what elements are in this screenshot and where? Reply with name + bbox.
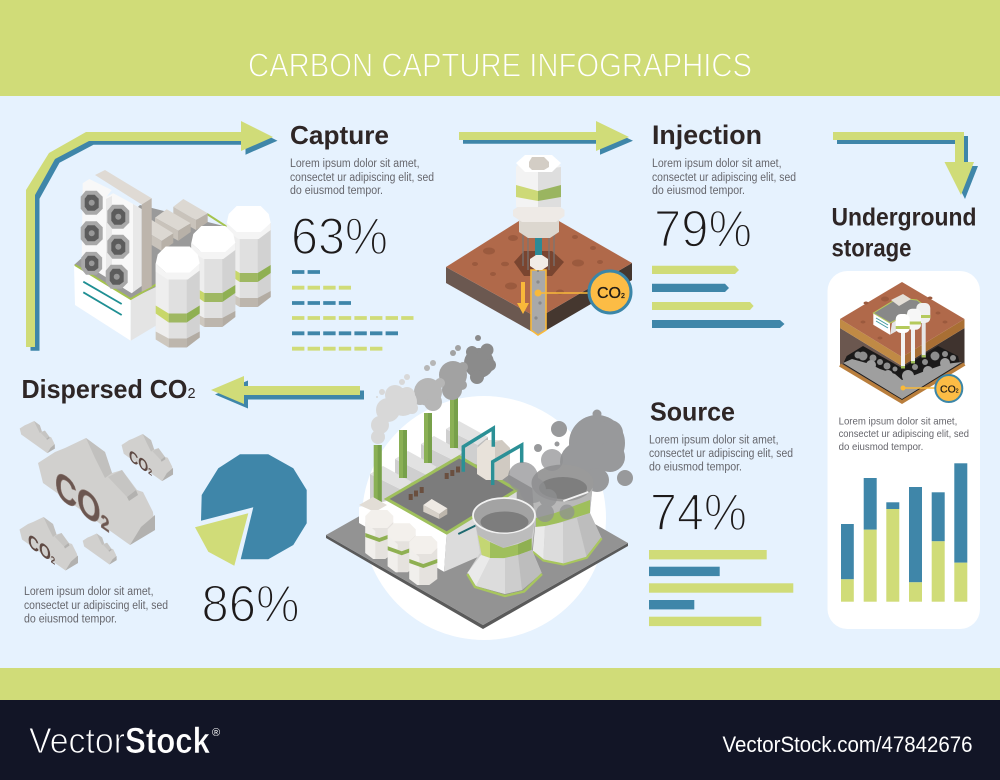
- arrow: to injection: [459, 121, 633, 155]
- leader line: [903, 387, 937, 389]
- upper body: [532, 482, 593, 527]
- footer bar: [0, 700, 1000, 780]
- section: dispersed CO2: [20, 374, 307, 634]
- yellow arrow: [517, 282, 529, 314]
- icon: injection well: [446, 155, 632, 335]
- rim: [473, 498, 535, 533]
- text: source description: [649, 434, 793, 474]
- stacked bar chart: [841, 463, 967, 602]
- band: [478, 535, 490, 558]
- icon: injection well: CO2: [597, 285, 625, 302]
- leader line: [538, 292, 590, 294]
- section: capture: [290, 120, 434, 349]
- rim: [532, 464, 594, 502]
- cloud bottom left: [20, 517, 78, 570]
- text: injection description: consectet ur adipiscing elit, sed: [652, 172, 796, 184]
- body: [467, 514, 542, 594]
- text: source description: do eiusmod tempor.: [649, 462, 742, 474]
- icon: CO2 clouds: CO2: [28, 529, 56, 569]
- text: capture description: consectet ur adipiscing elit, sed: [290, 172, 434, 184]
- upper body: [474, 514, 536, 548]
- heading: source: Source: [650, 396, 735, 426]
- text: source description: consectet ur adipiscing elit, sed: [649, 448, 793, 460]
- section: injection: [652, 120, 796, 328]
- text: dispersed description: consectet ur adipiscing elit, sed: [24, 600, 168, 612]
- chimney smoke: [371, 335, 496, 444]
- icon: CO2 clouds: [20, 421, 173, 570]
- stat: 79%: 79%: [654, 201, 752, 259]
- main cloud: [38, 438, 155, 545]
- arrow: to capture: [26, 121, 278, 351]
- chimneys: [374, 398, 458, 508]
- lower faces: [533, 526, 545, 560]
- teal pipes: [463, 428, 493, 472]
- text: injection description: [652, 158, 796, 197]
- front cooling tower: [467, 498, 542, 596]
- watermark logo: Vector: [29, 720, 125, 761]
- small cloud top left: [20, 421, 55, 453]
- text: dispersed description: [24, 586, 168, 626]
- icon: CO2 clouds: CO2: [129, 447, 152, 480]
- badge: CO2: [589, 271, 631, 313]
- mini tanks: [896, 303, 930, 333]
- heading: underground storage: Underground: [832, 204, 976, 232]
- pie chart: [195, 454, 307, 566]
- arrow: to dispersed CO2: [211, 376, 364, 408]
- icon: underground cross-section: [840, 282, 964, 403]
- stat: 63%: 63%: [291, 208, 388, 266]
- well shaft: [531, 270, 546, 335]
- text: injection description: Lorem ipsum dolor sit amet,: [652, 158, 782, 170]
- back cooling tower: [532, 464, 602, 564]
- dashed bars: [292, 272, 414, 349]
- fan panel: [82, 179, 138, 293]
- text: injection description: do eiusmod tempor.: [652, 185, 745, 197]
- watermark logo: ®: [212, 727, 220, 739]
- text: capture description: do eiusmod tempor.: [290, 185, 383, 197]
- small tanks: [365, 510, 437, 585]
- heading: underground storage: [832, 204, 976, 262]
- watermark id: VectorStock.com/47842676: [722, 732, 972, 757]
- tower: [519, 219, 559, 238]
- mini factory: [890, 306, 920, 335]
- roof vents: [409, 466, 460, 500]
- panel: underground storage: [828, 271, 980, 629]
- stat: 86%: 86%: [202, 576, 300, 634]
- heading: underground storage: storage: [832, 234, 912, 262]
- well pad: [514, 251, 564, 276]
- drifting smoke: [508, 449, 574, 522]
- pipes: [523, 232, 554, 272]
- back slab: [95, 170, 152, 204]
- body: [532, 482, 602, 564]
- section: source: [649, 396, 793, 626]
- text: capture description: Lorem ipsum dolor sit amet,: [290, 158, 420, 170]
- arrow: to underground storage: [833, 132, 978, 199]
- text: storage description: do eiusmod tempor.: [839, 441, 923, 453]
- building: [359, 457, 517, 572]
- stat: 74%: 74%: [650, 484, 747, 542]
- ground slab: [326, 535, 628, 629]
- icon: underground cross-section: CO2: [940, 384, 959, 396]
- fans: [81, 191, 129, 289]
- tanks: [227, 206, 271, 307]
- lower faces: [467, 555, 490, 586]
- title: CARBON CAPTURE INFOGRAPHICS: [248, 46, 752, 84]
- text: storage description: consectet ur adipiscing elit, sed: [839, 428, 969, 440]
- bars: [649, 550, 793, 626]
- watermark logo: Stock: [125, 720, 211, 761]
- mini pipes: [922, 318, 926, 358]
- text: capture description: [290, 158, 434, 197]
- white circle: [362, 396, 606, 640]
- text: storage description: Lorem ipsum dolor sit amet,: [839, 416, 957, 428]
- cloud top right: [122, 434, 173, 481]
- bottom band: [0, 668, 1000, 700]
- top band: [0, 0, 1000, 96]
- text: source description: Lorem ipsum dolor sit amet,: [649, 434, 778, 446]
- rear tank: [477, 440, 510, 480]
- roof crate: [423, 505, 439, 519]
- bars: [652, 266, 784, 328]
- back blocks: [370, 421, 488, 510]
- icon: CO2 clouds: CO2: [55, 461, 109, 541]
- watermark logo: [29, 720, 220, 761]
- text: dispersed description: do eiusmod tempor.: [24, 614, 117, 626]
- back smoke: [534, 410, 633, 492]
- text: storage description: [839, 416, 969, 453]
- heading: injection: Injection: [652, 120, 762, 150]
- text: dispersed description: Lorem ipsum dolor sit amet,: [24, 586, 154, 598]
- badge: CO2: [935, 375, 962, 402]
- beige boxes: [152, 199, 208, 251]
- heading: dispersed CO2: Dispersed CO2: [22, 374, 195, 404]
- small cloud lower: [83, 534, 117, 565]
- heading: capture: Capture: [290, 120, 389, 150]
- icon: capture plant: [74, 170, 271, 348]
- band: [536, 500, 590, 529]
- illustration: power plant: [326, 335, 633, 640]
